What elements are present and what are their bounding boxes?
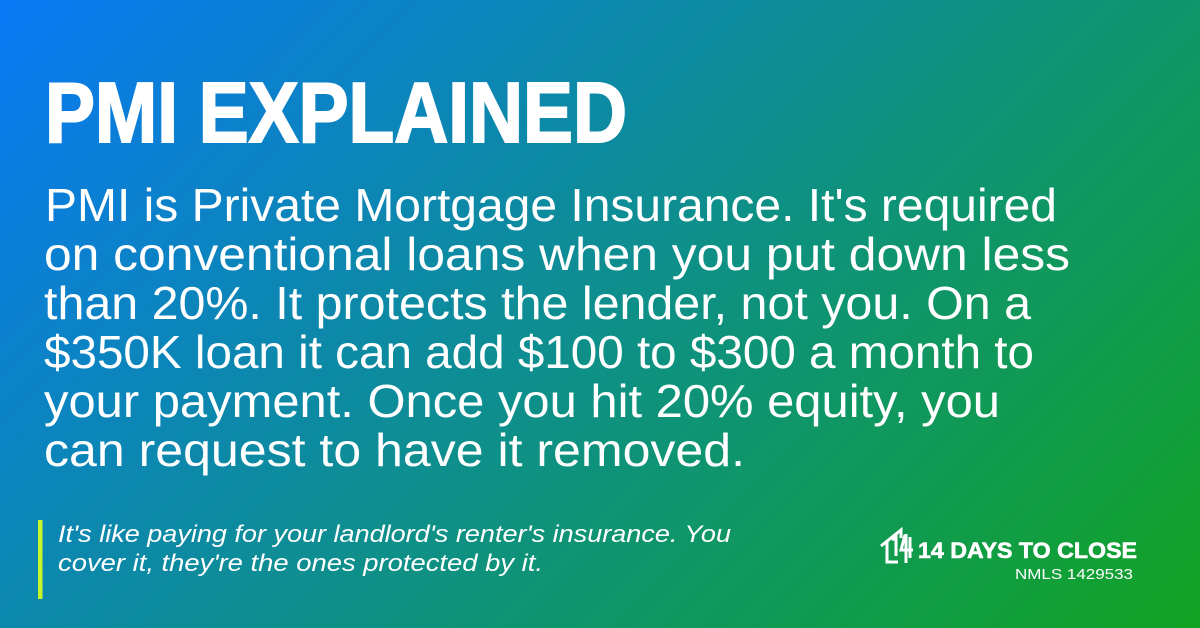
brand name: 14 DAYS TO CLOSE: [918, 538, 1137, 563]
body text block: PMI is Private Mortgage Insurance. It's required: [45, 179, 1057, 231]
body text block: than 20%. It protects the lender, not you. On a: [44, 277, 1031, 329]
NMLS number: NMLS 1429533: [1015, 566, 1133, 583]
body text block: $350K loan it can add $100 to $300 a month to: [44, 326, 1034, 378]
callout accent bar: [38, 520, 42, 599]
callout text: cover it, they're the ones protected by it.: [58, 550, 543, 577]
body text block: [44, 179, 1070, 476]
title: PMI EXPLAINED: [45, 66, 627, 161]
callout text: [58, 521, 731, 577]
callout text: It's like paying for your landlord's renter's insurance. You: [58, 521, 731, 548]
body text block: your payment. Once you hit 20% equity, you: [44, 375, 1000, 427]
body text block: can request to have it removed.: [44, 424, 745, 476]
callout: analogy quote: [38, 520, 731, 599]
logo: [881, 530, 1137, 583]
icon: house with 14: [881, 530, 913, 563]
body text block: on conventional loans when you put down less: [44, 228, 1070, 280]
